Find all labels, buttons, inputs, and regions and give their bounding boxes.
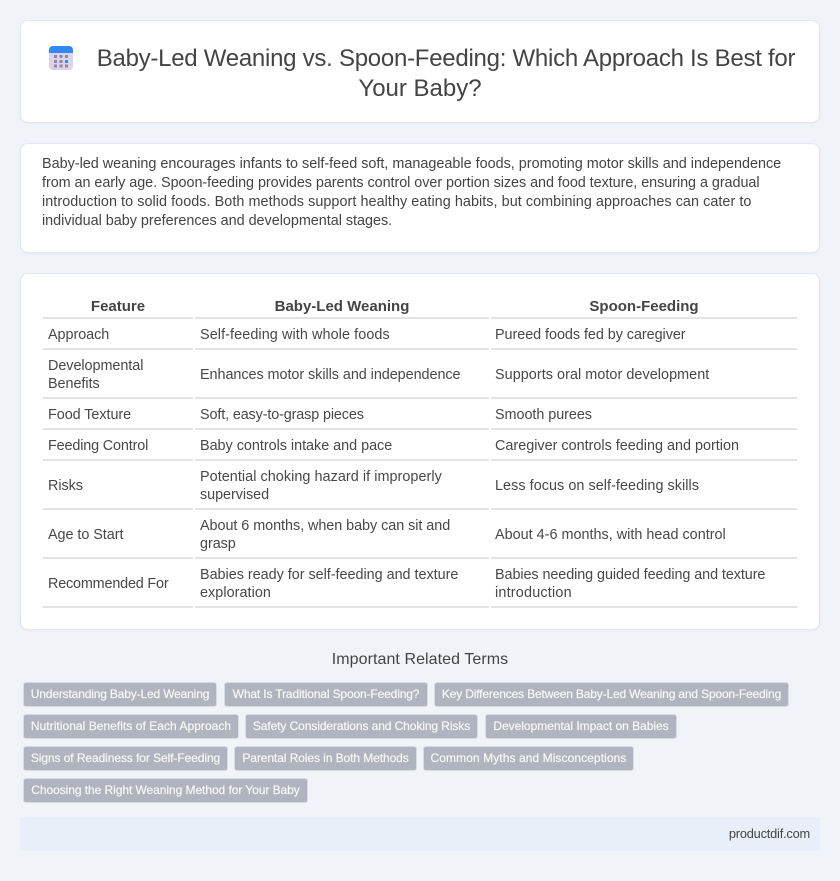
- text: exploration: [200, 585, 271, 601]
- text: Soft, easy-to-grasp pieces: [200, 407, 364, 423]
- panel: introduction: [20, 143, 820, 253]
- text: Babies needing guided feeding and texture: [495, 567, 765, 583]
- text: Recommended For: [48, 576, 168, 592]
- tag: Developmental Impact on Babies: [493, 719, 669, 733]
- panel: comparison table: [20, 273, 820, 630]
- text: Baby-Led Weaning: [275, 298, 409, 315]
- text: Caregiver controls feeding and portion: [495, 438, 739, 454]
- text: Feature: [91, 298, 145, 315]
- row: risks: [48, 469, 699, 503]
- text: Food Texture: [48, 407, 131, 423]
- text: About 4-6 months, with head control: [495, 527, 726, 543]
- text: Baby-led weaning encourages infants to self-feed soft, manageable foods, promoting motor skills and independence: [42, 156, 781, 172]
- row: age to start: [48, 518, 726, 552]
- text: Benefits: [48, 376, 100, 392]
- text block: introduction: [42, 156, 781, 229]
- text: Approach: [48, 327, 109, 343]
- text: Enhances motor skills and independence: [200, 367, 460, 383]
- tag: Signs of Readiness for Self-Feeding: [31, 751, 220, 765]
- tag: Key Differences Between Baby-Led Weaning and Spoon-Feeding: [442, 687, 781, 701]
- tag: What Is Traditional Spoon-Feeding?: [233, 687, 419, 701]
- tag: Parental Roles in Both Methods: [242, 751, 409, 765]
- title: [97, 45, 796, 102]
- icon: calendar: [49, 46, 73, 70]
- text: Babies ready for self-feeding and texture: [200, 567, 458, 583]
- table header: [91, 298, 699, 315]
- text: grasp: [200, 536, 236, 552]
- text: Baby controls intake and pace: [200, 438, 392, 454]
- text: individual baby preferences and developmental stages.: [42, 213, 392, 229]
- tag: Understanding Baby-Led Weaning: [31, 687, 209, 701]
- tag: [23, 682, 217, 707]
- text: Self-feeding with whole foods: [200, 327, 390, 343]
- tag: [245, 714, 478, 739]
- text: Risks: [48, 478, 83, 494]
- text: Pureed foods fed by caregiver: [495, 327, 686, 343]
- panel: title card: [20, 20, 820, 123]
- tag: [423, 746, 634, 771]
- tag: [485, 714, 677, 739]
- text: About 6 months, when baby can sit and: [200, 518, 450, 534]
- row: approach: [48, 327, 686, 343]
- footer bar: [20, 817, 820, 851]
- text: Supports oral motor development: [495, 367, 709, 383]
- row: food texture: [48, 407, 592, 423]
- heading: important related terms: Important Related Terms: [332, 651, 508, 668]
- row: feeding control: [48, 438, 739, 454]
- text: Baby-Led Weaning vs. Spoon-Feeding: Which Approach Is Best for: [97, 45, 795, 72]
- text: Your Baby?: [358, 75, 482, 102]
- text: Feeding Control: [48, 438, 148, 454]
- tag: Safety Considerations and Choking Risks: [253, 719, 470, 733]
- related term tags: [23, 682, 789, 803]
- tag: [234, 746, 417, 771]
- text: Developmental: [48, 358, 143, 374]
- tag: [23, 714, 239, 739]
- text: from an early age. Spoon-feeding provides parents control over portion sizes and food texture, ensuring a gradual: [42, 175, 760, 191]
- comparison table: [43, 298, 797, 608]
- text: supervised: [200, 487, 269, 503]
- text: introduction to solid foods. Both methods support healthy eating habits, but combining approaches can cater to: [42, 194, 751, 210]
- tag: Nutritional Benefits of Each Approach: [31, 719, 231, 733]
- text: Less focus on self-feeding skills: [495, 478, 699, 494]
- tag: Common Myths and Misconceptions: [431, 751, 626, 765]
- text: Potential choking hazard if improperly: [200, 469, 442, 485]
- row: recommended for: [48, 567, 765, 601]
- footer text: productdif.com: [729, 826, 810, 841]
- text: Spoon-Feeding: [589, 298, 699, 315]
- text: Smooth purees: [495, 407, 592, 423]
- text: Age to Start: [48, 527, 123, 543]
- tag: Choosing the Right Weaning Method for Your Baby: [31, 783, 300, 797]
- tag: [23, 778, 308, 803]
- tag: [434, 682, 789, 707]
- row: developmental benefits: [48, 358, 710, 392]
- tag: [224, 682, 428, 707]
- text: introduction: [495, 585, 572, 601]
- tag: [23, 746, 228, 771]
